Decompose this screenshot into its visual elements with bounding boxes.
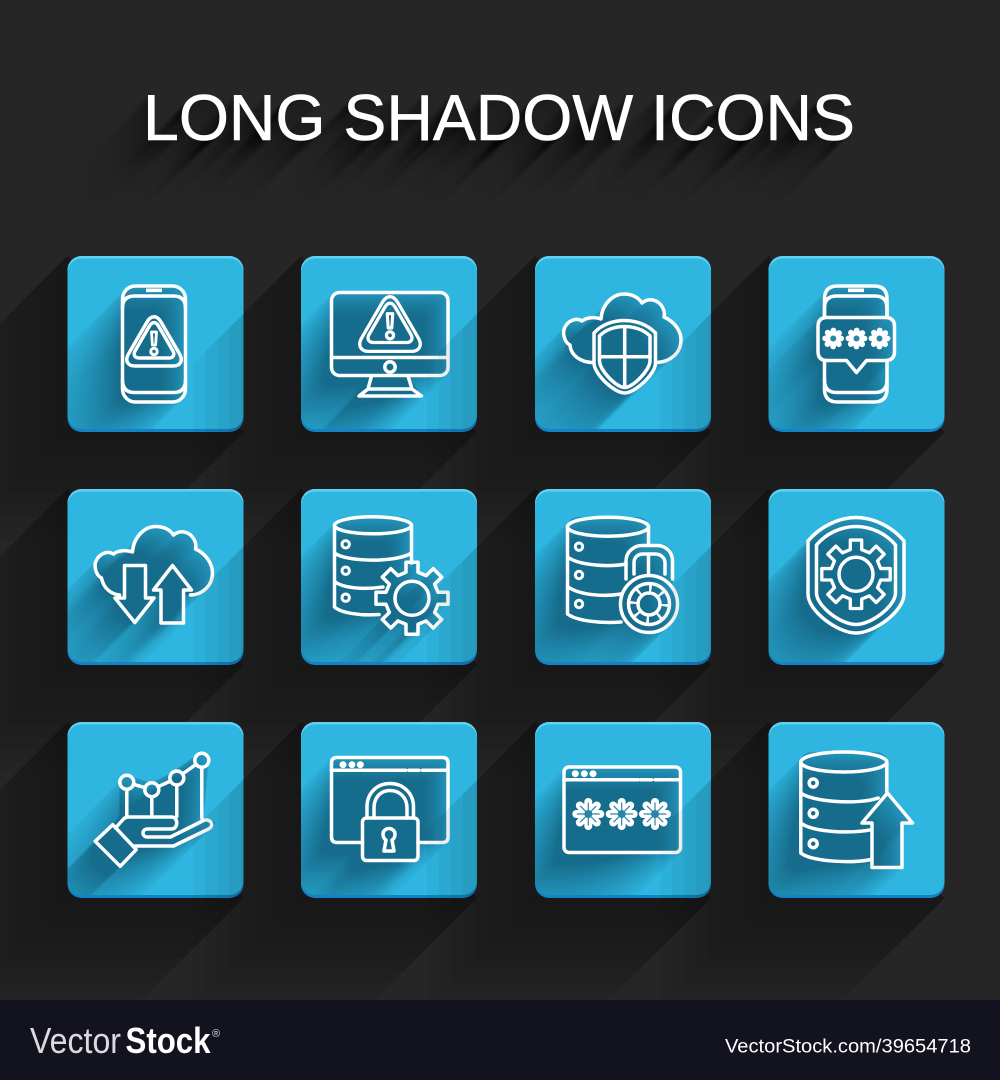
tile: phone with warning <box>8 256 244 492</box>
tile: database with gear <box>194 489 477 725</box>
icon: cloud transfer <box>95 526 212 623</box>
icon: phone password <box>818 286 894 402</box>
icon: cloud shield <box>564 294 681 393</box>
tile: cloud with up and down arrows <box>8 489 244 725</box>
footer logo: Vector <box>30 1020 121 1061</box>
title: LONG SHADOW ICONS <box>143 81 855 154</box>
footer bar <box>0 1000 1000 1080</box>
icon: hand chart <box>95 753 212 866</box>
footer image id: VectorStock.com/39654718 <box>725 1036 971 1058</box>
tile: shield with gear <box>660 489 944 725</box>
tile: database with combination lock <box>427 489 711 725</box>
icon: browser password <box>564 767 680 852</box>
tile: hand holding line chart <box>8 722 244 958</box>
icon: database gear <box>334 517 448 634</box>
tile: browser window with padlock <box>193 722 477 958</box>
icon: shield gear <box>808 518 904 633</box>
footer logo <box>30 1020 220 1061</box>
tile: monitor with warning <box>205 256 477 492</box>
tile: database with upload arrow <box>660 722 944 958</box>
tile: cloud with shield <box>427 256 711 492</box>
icon: database upload <box>801 752 912 868</box>
icon: database lock <box>568 517 678 632</box>
icon: browser padlock <box>332 758 448 860</box>
icon: monitor warning <box>332 292 448 396</box>
footer logo: Stock <box>126 1020 211 1061</box>
icon: phone warning <box>122 286 186 402</box>
tile: browser window with password <box>427 722 711 958</box>
footer logo: ® <box>212 1028 220 1040</box>
tile: phone with password bubble <box>662 256 944 492</box>
